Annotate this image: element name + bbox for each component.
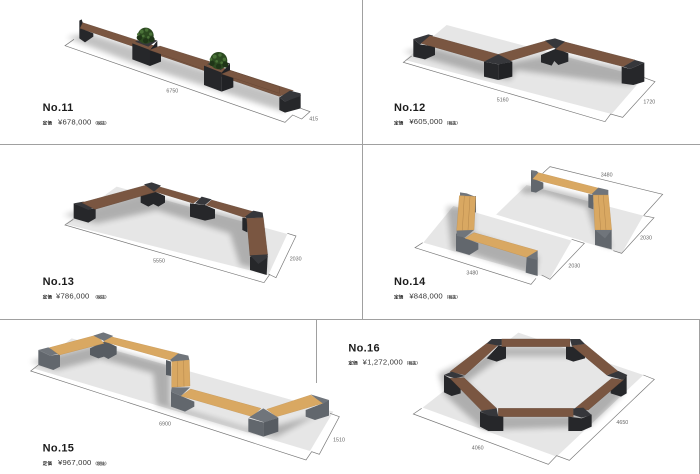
left block (413, 34, 435, 59)
price No.15 (43, 458, 109, 467)
price No.16: 定価 (348, 360, 358, 367)
back block (90, 341, 117, 359)
dimension 5160: 5160 (497, 98, 509, 104)
dimension 1720: 1720 (643, 99, 655, 105)
bottom-left block (480, 408, 503, 431)
top-right cap (570, 339, 585, 346)
bottom-right block (568, 408, 592, 431)
dimension 1510: 1510 (333, 437, 345, 443)
price No.16 (348, 358, 420, 367)
price No.15: （税抜） (93, 460, 109, 466)
dimension lines (31, 365, 339, 460)
seat 1 (49, 335, 104, 355)
seat 4 (181, 389, 261, 417)
dimension lines (415, 167, 663, 284)
middle block (484, 54, 512, 80)
seat 2 (498, 41, 554, 61)
price No.12: 定価 (394, 119, 404, 126)
corner cap (170, 353, 189, 362)
bench end leg left (79, 19, 93, 42)
title No.15: No.15 (43, 443, 74, 455)
top-left block (487, 346, 506, 362)
back block (141, 192, 165, 207)
front seat 2 (465, 233, 538, 257)
panel: No.14 bench pair (394, 167, 663, 300)
price No.16: ¥1,272,000 (363, 358, 403, 367)
price No.11: 定価 (43, 119, 52, 126)
rear end block (595, 230, 612, 249)
wooden seat (80, 23, 293, 96)
price No.16: （税抜） (404, 360, 420, 366)
panel: No.11 bench with planters (43, 19, 318, 126)
right block (622, 60, 644, 85)
rear seat 1 (533, 173, 599, 194)
dimension 6750: 6750 (166, 89, 178, 95)
rear seat 2 (593, 195, 612, 230)
price No.13: （税抜） (93, 293, 109, 299)
top-left cap (487, 339, 502, 346)
right end block (279, 91, 301, 113)
panel: No.15 bench (30, 332, 345, 467)
panel: No.12 bench (394, 25, 655, 126)
planter 2 (204, 52, 233, 92)
dimension lines (65, 39, 310, 122)
lower-left seat (450, 378, 497, 411)
top seat (502, 339, 570, 347)
seat 2 (155, 186, 200, 203)
price No.15: ¥967,000 (58, 458, 92, 467)
dimension 2030: 2030 (290, 257, 302, 263)
rear bench leg (531, 170, 543, 193)
price No.14: 定価 (394, 293, 404, 300)
mid block (190, 197, 215, 221)
floor rear (496, 185, 643, 253)
front seat 1 (457, 196, 476, 231)
seat 4 (247, 218, 268, 256)
junction cap (144, 182, 161, 192)
seat 3 (206, 200, 253, 218)
left block (444, 372, 465, 396)
left block (74, 202, 96, 223)
title No.16: No.16 (348, 342, 380, 354)
dimension lines (65, 219, 296, 283)
dimension lines (413, 375, 654, 464)
title No.14: No.14 (394, 276, 426, 288)
title No.12: No.12 (394, 102, 426, 114)
upper-right seat (572, 344, 619, 375)
right rear block (306, 394, 329, 420)
right block (607, 371, 627, 397)
panel: No.16 hexagon bench (348, 333, 654, 464)
front small leg (473, 196, 476, 213)
dimension 415: 415 (309, 117, 318, 123)
seat 3 (556, 41, 635, 67)
floor (423, 333, 643, 457)
small leg (166, 360, 171, 376)
title No.11: No.11 (43, 102, 74, 114)
mid block (171, 387, 194, 412)
seat 1 (82, 185, 157, 209)
left block (38, 347, 60, 370)
end block (250, 254, 268, 275)
junction cap (93, 332, 113, 341)
upper-left seat (450, 343, 498, 375)
price No.14 (394, 291, 460, 300)
dimension 2030 front: 2030 (568, 263, 580, 269)
seat 5 (267, 395, 323, 417)
seat segment right (222, 70, 279, 93)
floor (33, 338, 333, 451)
price No.14: ¥848,000 (409, 291, 443, 300)
lower-right seat (575, 378, 623, 410)
price No.13: 定価 (43, 293, 52, 300)
front block (248, 408, 278, 437)
price No.11: （税抜） (93, 119, 109, 125)
price No.12: ¥605,000 (409, 117, 443, 126)
seat 2 (104, 336, 178, 360)
panel: No.13 bench (43, 182, 302, 300)
price No.11: ¥678,000 (58, 117, 92, 126)
floor front (423, 206, 572, 278)
dimension 3480 bottom: 3480 (466, 270, 478, 276)
dimension 2030 rear: 2030 (640, 235, 652, 241)
price No.15: 定価 (43, 460, 52, 467)
seat 1 (421, 36, 498, 62)
seat 3 (172, 360, 190, 387)
rear corner cap (592, 188, 608, 195)
front block (456, 230, 478, 255)
front cap (460, 192, 475, 197)
price No.12 (394, 117, 460, 126)
dimension lines (403, 56, 655, 122)
junction cap (545, 38, 565, 49)
dimension 4650: 4650 (616, 420, 628, 426)
dimension 6900: 6900 (159, 422, 171, 428)
price No.14: （税抜） (444, 293, 460, 299)
dimension 3480 top: 3480 (601, 173, 613, 179)
title No.13: No.13 (43, 276, 74, 288)
floor (65, 187, 287, 275)
top-right block (566, 347, 585, 362)
planter 1 (132, 28, 210, 69)
price No.13 (43, 291, 109, 300)
dimension 4060: 4060 (472, 445, 484, 451)
bottom seat (498, 408, 573, 417)
corner cap (245, 211, 263, 218)
price No.13: ¥786,000 (56, 291, 90, 300)
price No.12: （税抜） (444, 119, 460, 125)
price No.11 (43, 117, 109, 126)
small leg (242, 218, 247, 232)
rear small leg (588, 194, 593, 209)
back block (541, 48, 568, 66)
floor (405, 25, 643, 114)
front end block (526, 251, 538, 276)
dimension 5550: 5550 (153, 259, 165, 265)
